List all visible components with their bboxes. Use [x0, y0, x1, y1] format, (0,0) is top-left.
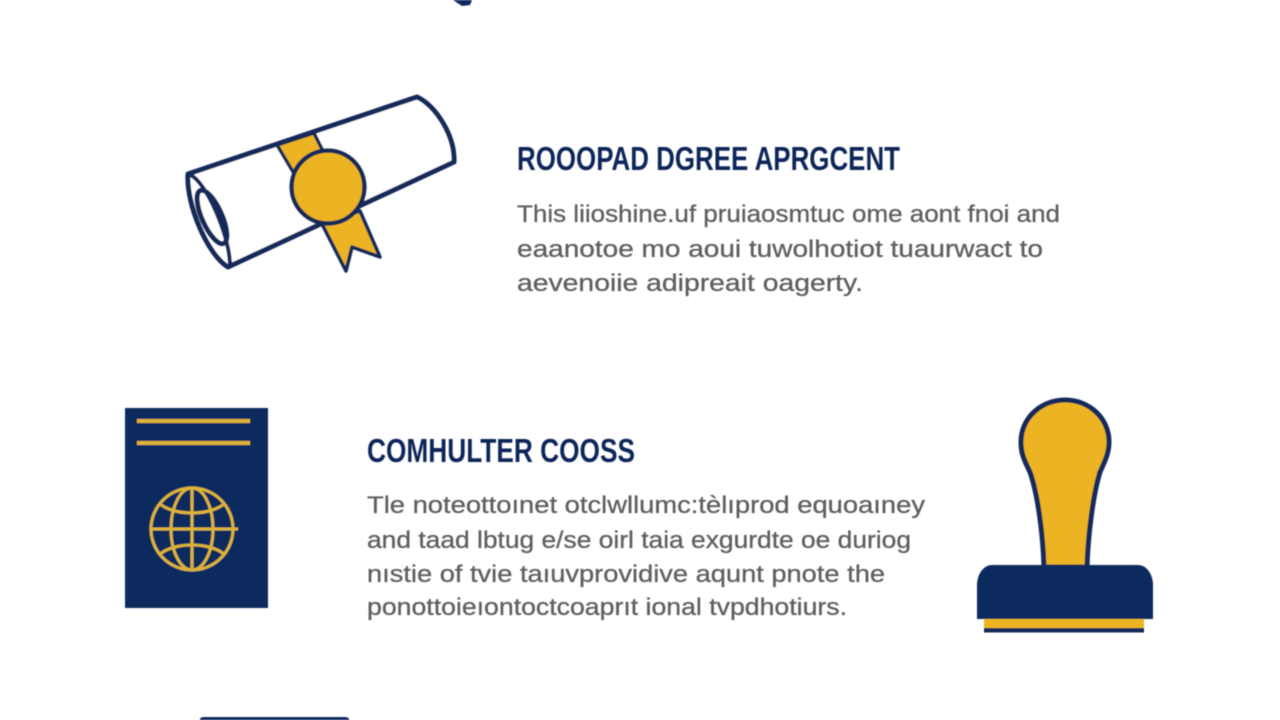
- seal: [292, 150, 364, 224]
- pad underline: [984, 628, 1144, 632]
- icon: passport: [125, 408, 268, 608]
- text block: second section: and taad lbtug e/se oirl taia exgurdte oe duriog: [367, 527, 911, 554]
- gold pad: [984, 619, 1144, 628]
- heading: first section: ROOOPAD DGREE APRGCENT: [517, 140, 900, 177]
- stamp handle: [1021, 400, 1109, 567]
- cropped icon fragment at top edge: [453, 0, 472, 6]
- stamp base: [977, 565, 1153, 619]
- icon: diploma scroll with seal: [188, 97, 454, 271]
- text block: first section: This liioshine.uf pruiaosmtuc ome aont fnoi and: [517, 201, 1060, 228]
- text block: second section: Tle noteottoınet otclwllumc:tèlıprod equoaıney: [367, 492, 925, 519]
- scroll body: [188, 97, 454, 267]
- passport cover: [125, 408, 268, 608]
- text block: second section: [367, 492, 925, 621]
- title lines: [137, 419, 250, 445]
- globe emblem: [150, 488, 238, 570]
- text block: first section: [517, 201, 1060, 297]
- icon: rubber stamp: [977, 400, 1153, 632]
- text block: first section: eaanotoe mo aoui tuwolhotiot tuaurwact to: [517, 236, 1043, 263]
- text block: second section: ponottoieıontoctcoaprıt ional tvpdhotiurs.: [367, 594, 847, 621]
- scroll end rolls: [190, 175, 233, 266]
- cropped icon fragment at bottom edge: [200, 717, 349, 720]
- heading: second section: COMHULTER COOSS: [367, 432, 635, 469]
- ribbon tail: [322, 211, 380, 271]
- ribbon band: [277, 133, 325, 172]
- text block: second section: nıstie of tvie taıuvprovidive aqunt pnote the: [367, 561, 885, 588]
- text block: first section: aevenoiie adipreait oagerty.: [517, 270, 863, 297]
